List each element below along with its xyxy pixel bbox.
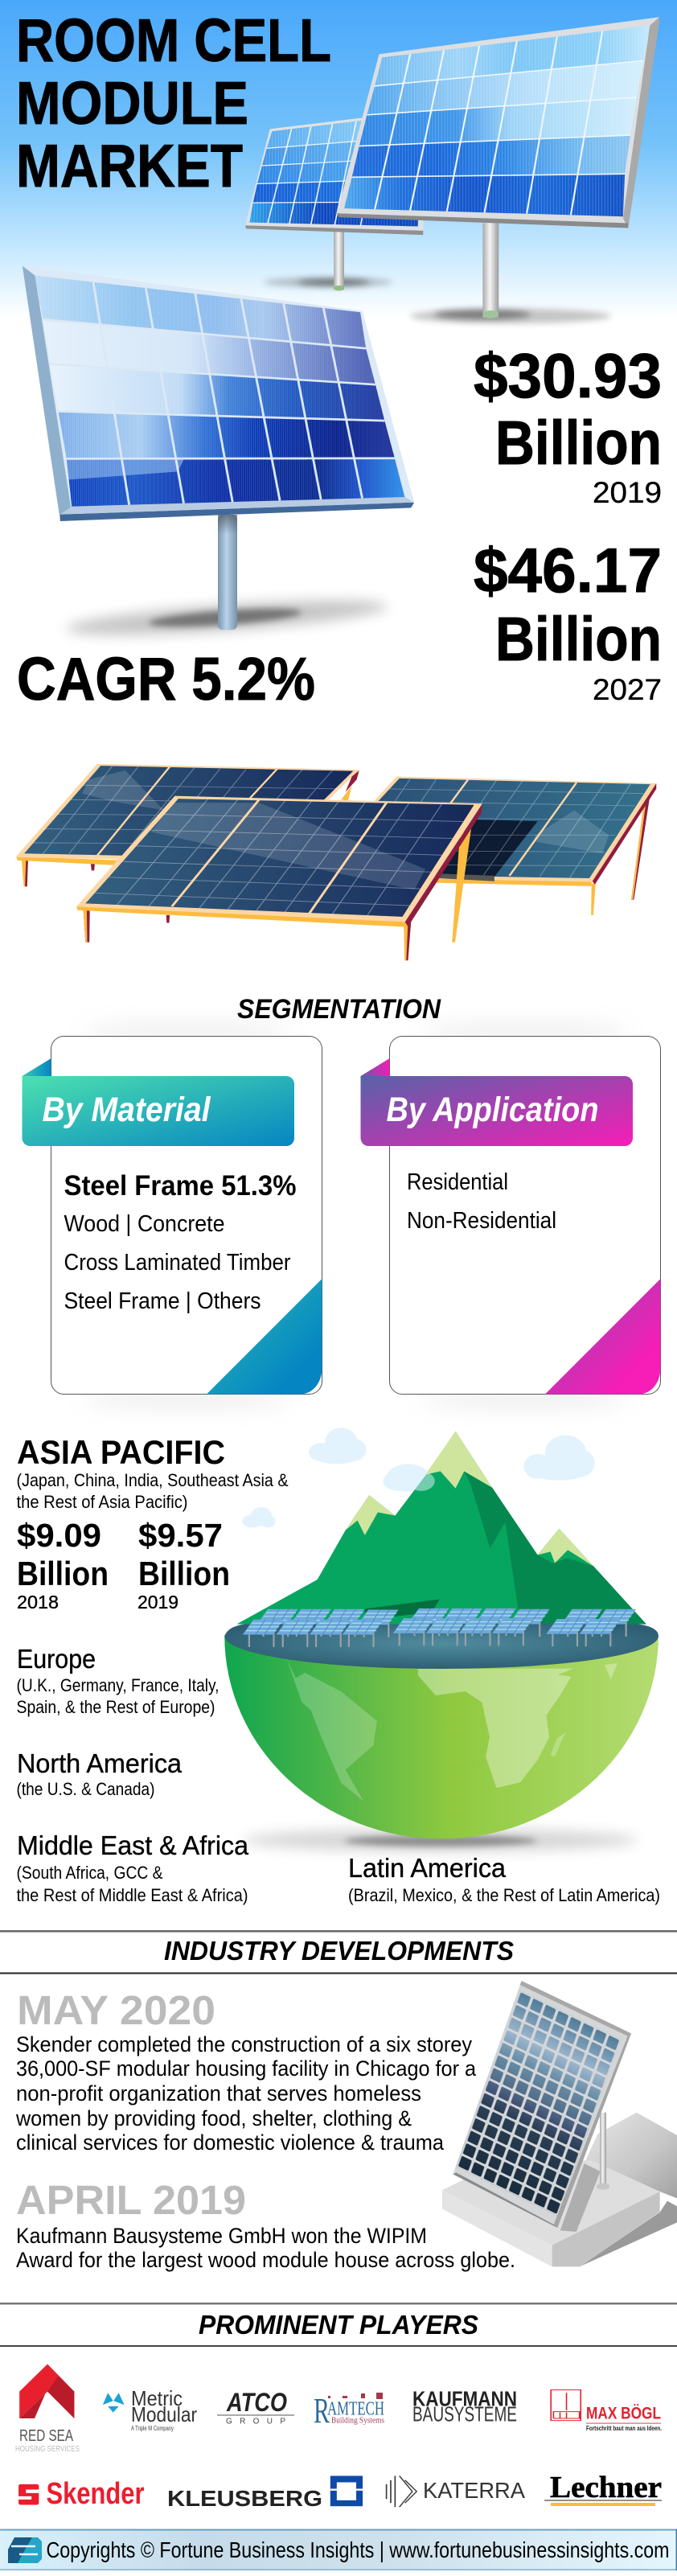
logo: katerra — [387, 2475, 525, 2507]
logo: red sea: HOUSING SERVICES — [15, 2445, 80, 2454]
logo: max boegl: MAX BÖGL — [586, 2405, 661, 2422]
illustration: globe with mountain and solar farm — [224, 1428, 659, 1851]
panel — [453, 1981, 631, 2228]
logo: ramtech — [314, 2391, 384, 2430]
banner label: By Application — [386, 1091, 598, 1129]
rear panel — [245, 110, 428, 235]
mountain — [236, 1432, 646, 1624]
countries line 1: (U.K., Germany, France, Italy, — [16, 1675, 219, 1695]
title line 2: MODULE — [16, 69, 248, 137]
logo: metric modular: Modular — [131, 2402, 197, 2426]
region name: ASIA PACIFIC — [17, 1433, 225, 1471]
body text: clinical services for domestic violence & trauma — [16, 2130, 445, 2155]
corner accent — [207, 1279, 322, 1395]
body text: 36,000-SF modular housing facility in Chicago for a — [16, 2056, 477, 2081]
ground shadow — [244, 1829, 638, 1851]
market size 2027 — [474, 535, 662, 706]
logo: skender — [18, 2477, 145, 2511]
countries line 1: (Japan, China, India, Southeast Asia & — [16, 1470, 289, 1490]
countries line 2: the Rest of Middle East & Africa) — [16, 1885, 248, 1905]
countries line 2: Spain, & the Rest of Europe) — [16, 1697, 215, 1717]
logo: metric modular — [103, 2386, 197, 2432]
logo: kaufmann bausysteme — [412, 2387, 517, 2426]
ribbon fold — [360, 1058, 389, 1076]
item line 2: Cross Laminated Timber — [64, 1250, 291, 1276]
year 2027: 2027 — [593, 673, 662, 706]
title line 1: ROOM CELL — [16, 6, 331, 74]
logo: metric modular: A Triple M Company — [131, 2425, 174, 2432]
logo: kleusberg: KLEUSBERG — [167, 2486, 322, 2511]
logo: kleusberg — [167, 2475, 363, 2511]
body text — [16, 2224, 515, 2272]
sky background — [0, 0, 677, 318]
logo: red sea — [15, 2364, 80, 2454]
panel post — [218, 515, 237, 630]
item line 1: Wood | Concrete — [64, 1211, 225, 1237]
body text: Skender completed the construction of a six storey — [16, 2032, 472, 2056]
card shadow — [421, 1029, 630, 1402]
logo: skender: Skender — [47, 2477, 145, 2511]
region name: Europe — [17, 1644, 96, 1674]
countries line 1: (South Africa, GCC & — [16, 1863, 163, 1883]
support strut — [597, 2113, 609, 2190]
illustration: solar panel on concrete base — [442, 1981, 677, 2266]
title line 3: MARKET — [16, 132, 243, 199]
front table — [76, 796, 482, 960]
banner — [23, 1076, 294, 1146]
region name: Middle East & Africa — [17, 1830, 249, 1860]
item 1: Residential — [407, 1169, 508, 1195]
continents — [287, 1659, 618, 1801]
illustration: large blue solar panel — [23, 266, 414, 642]
year 2019: 2019 — [137, 1592, 178, 1613]
water disk — [224, 1623, 659, 1669]
development: may 2020 — [15, 1987, 477, 2155]
body text — [15, 2032, 477, 2155]
body text: Kaufmann Bausysteme GmbH won the WIPIM — [16, 2224, 427, 2248]
region: north america — [16, 1748, 183, 1799]
unit 2018: Billion — [17, 1555, 109, 1592]
card shadow — [82, 1029, 291, 1402]
item line 3: Steel Frame | Others — [64, 1288, 261, 1314]
back right table — [306, 777, 656, 915]
logo: kaufmann bausysteme: KAUFMANN — [412, 2387, 517, 2411]
year 2019: 2019 — [593, 476, 662, 509]
footer logo — [8, 2537, 42, 2563]
region: middle east and africa — [16, 1830, 249, 1905]
logo: atco group: ATCO — [226, 2388, 287, 2417]
footer band — [0, 2529, 677, 2570]
globe hemisphere — [224, 1636, 659, 1839]
banner — [360, 1076, 633, 1146]
countries: (the U.S. & Canada) — [16, 1779, 154, 1799]
region: europe — [16, 1644, 219, 1717]
countries line 2: the Rest of Asia Pacific) — [16, 1492, 188, 1512]
region name: North America — [17, 1748, 183, 1778]
development: april 2019 — [16, 2177, 515, 2272]
logo: lechner: Lechner — [550, 2471, 662, 2504]
card outline — [51, 1036, 322, 1395]
front pole — [482, 223, 499, 318]
logo: max boegl — [551, 2390, 662, 2432]
logo: ramtech: Building Systems — [331, 2416, 384, 2426]
value 2019: $30.93 — [474, 340, 662, 411]
back wall — [585, 2113, 677, 2198]
logo: atco group — [217, 2388, 294, 2426]
body text: women by providing food, shelter, clothing & — [15, 2106, 412, 2130]
market size 2019 — [474, 340, 662, 509]
panel: by application — [360, 1029, 661, 1402]
ground shadows — [264, 277, 611, 323]
logo: katerra: KATERRA — [423, 2478, 525, 2503]
logo: red sea: RED SEA — [19, 2427, 73, 2445]
title — [16, 6, 331, 199]
value 2019: $9.57 — [138, 1517, 223, 1554]
logo: atco group: GROUP — [226, 2418, 285, 2426]
ground shadow — [580, 2201, 677, 2266]
date: MAY 2020 — [17, 1987, 215, 2033]
front panel — [337, 17, 659, 228]
heading: prominent players: PROMINENT PLAYERS — [199, 2310, 478, 2340]
panel side shadow — [560, 2163, 601, 2232]
item 2: Non-Residential — [407, 1208, 556, 1234]
rear pole — [334, 232, 344, 290]
logo: ramtech: AMTECH — [327, 2398, 384, 2419]
clouds — [242, 1428, 594, 1528]
body text: Award for the largest wood module house across globe. — [16, 2248, 515, 2272]
panel body — [23, 266, 414, 521]
illustration: three tilted solar tables — [15, 764, 656, 960]
card outline — [389, 1036, 661, 1395]
leading item: Steel Frame 51.3% — [64, 1170, 296, 1202]
cloud over mountain — [407, 1471, 435, 1491]
back left table — [15, 764, 359, 886]
unit 2019: Billion — [138, 1555, 230, 1592]
value 2027: $46.17 — [474, 535, 662, 606]
CAGR: CAGR 5.2% — [17, 645, 315, 713]
region name: Latin America — [348, 1853, 507, 1883]
logo: metric modular: Metric — [131, 2386, 183, 2410]
logo: ramtech: R — [314, 2391, 330, 2430]
region: latin america — [348, 1853, 660, 1905]
illustration: two solar panels on poles — [245, 17, 659, 323]
body text: non-profit organization that serves homeless — [16, 2081, 421, 2106]
heading: segmentation: SEGMENTATION — [237, 994, 441, 1025]
panel: by material — [23, 1029, 322, 1402]
banner label: By Material — [42, 1091, 211, 1129]
corner accent — [545, 1279, 661, 1395]
logo: kaufmann bausysteme: BAUSYSTEME — [412, 2401, 517, 2426]
solar farm — [243, 1608, 636, 1647]
base — [442, 2158, 660, 2266]
panel shadow — [65, 594, 388, 642]
heading: industry developments: INDUSTRY DEVELOPMENTS — [164, 1936, 514, 1966]
year 2018: 2018 — [17, 1592, 59, 1613]
region: asia pacific — [16, 1433, 289, 1613]
date: APRIL 2019 — [16, 2177, 246, 2223]
value 2018: $9.09 — [17, 1517, 101, 1554]
ribbon fold — [23, 1058, 51, 1076]
